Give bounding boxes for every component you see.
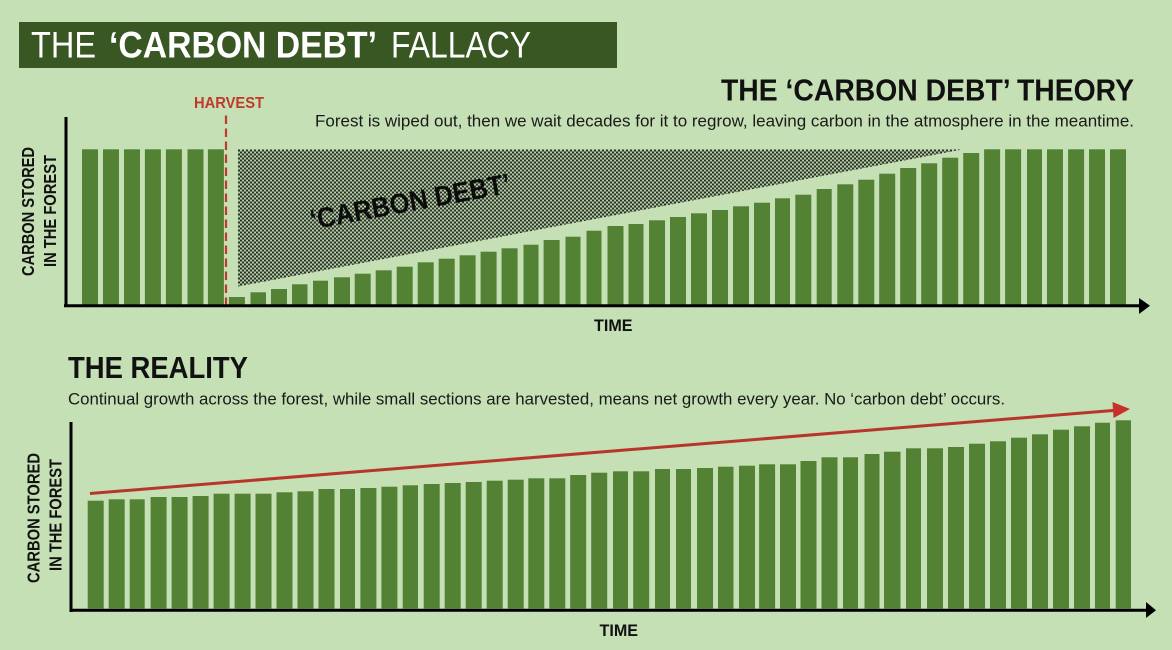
theory y-axis label <box>18 147 60 276</box>
heading: the carbon debt theory: THE ‘CARBON DEBT’ THEORY <box>721 72 1134 108</box>
title banner: ‘CARBON DEBT’ <box>109 24 377 66</box>
growth trend arrow <box>90 402 1130 494</box>
carbon debt label: ‘CARBON DEBT’ <box>307 168 513 235</box>
heading: the reality: THE REALITY <box>68 350 248 385</box>
theory description: Forest is wiped out, then we wait decades for it to regrow, leaving carbon in the atmosphere in the meantime. <box>315 112 1134 131</box>
theory y-axis label: IN THE FOREST <box>40 155 60 267</box>
reality y-axis label: CARBON STORED <box>24 453 44 583</box>
reality axes <box>70 422 1156 618</box>
theory bar chart <box>82 149 1126 305</box>
theory axes <box>64 117 1150 314</box>
harvest marker: HARVEST <box>194 95 264 112</box>
reality bar chart <box>88 420 1131 608</box>
reality y-axis label <box>24 453 66 583</box>
reality description: Continual growth across the forest, while small sections are harvested, means net growth every year. No ‘carbon debt’ occurs. <box>68 390 1005 408</box>
reality y-axis label: IN THE FOREST <box>46 459 66 571</box>
reality x-axis label: TIME <box>600 621 638 640</box>
title banner: FALLACY <box>391 24 531 66</box>
theory y-axis label: CARBON STORED <box>18 147 38 276</box>
carbon debt hatched area <box>238 150 962 286</box>
title banner: THE <box>31 24 96 66</box>
title banner <box>19 22 617 68</box>
theory x-axis label: TIME <box>594 316 632 335</box>
